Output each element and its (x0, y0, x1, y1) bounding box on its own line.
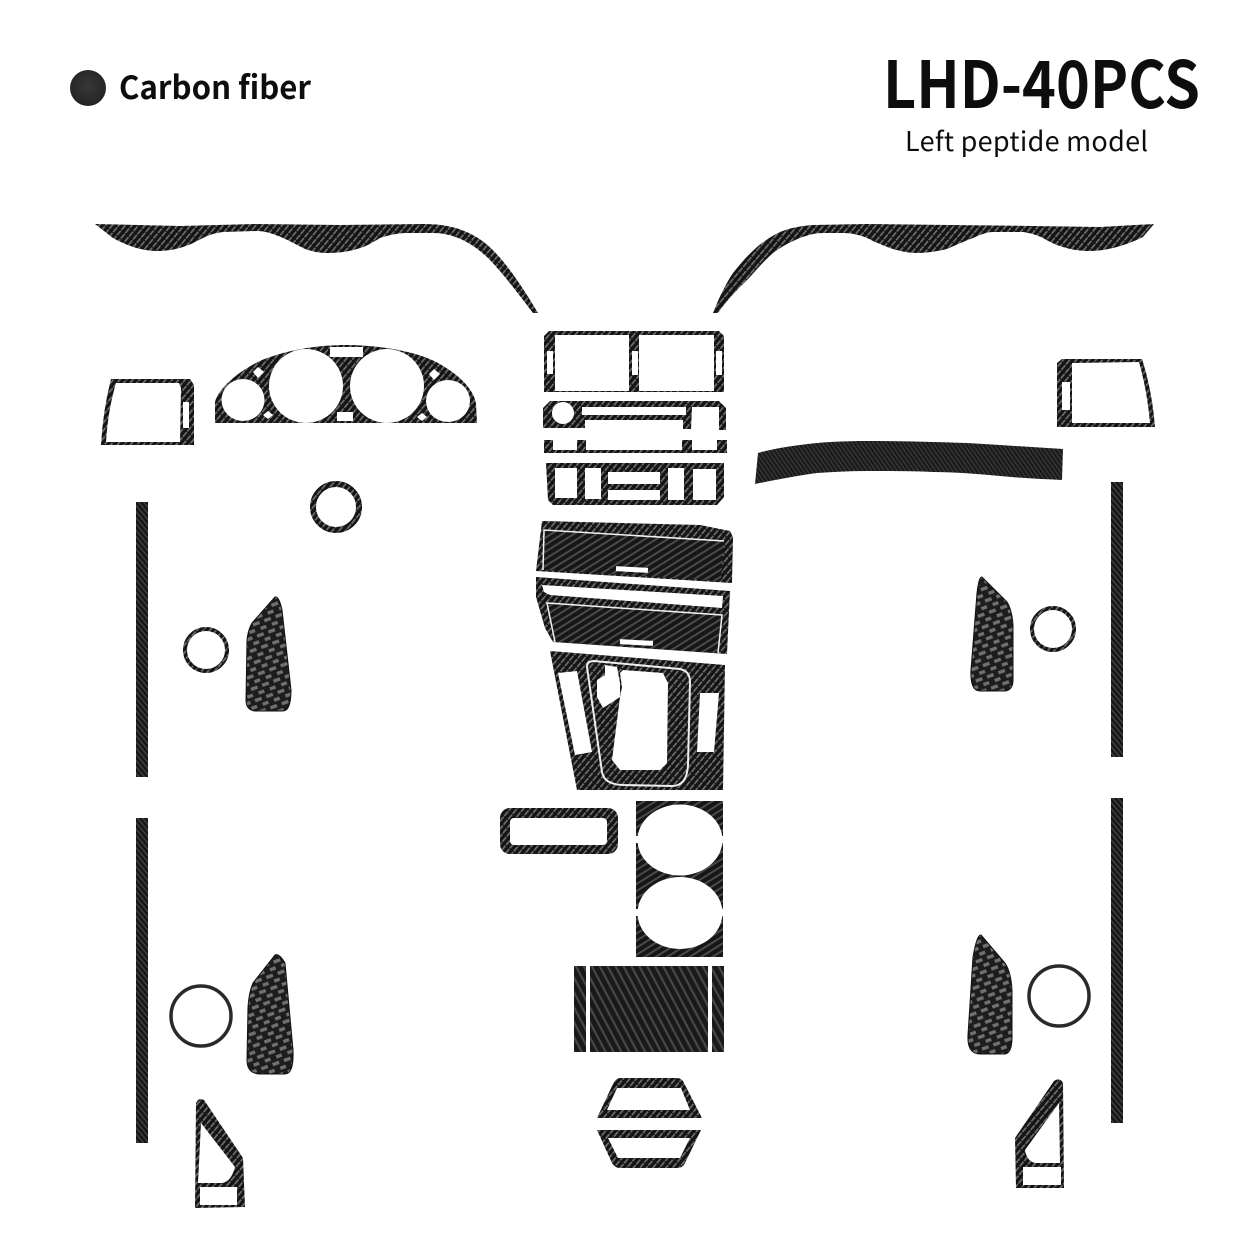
part: center console lid right strip (712, 966, 724, 1052)
part: left upper door ring (185, 629, 227, 671)
part: left lower door sill bar (136, 818, 148, 1143)
part: right lower window switch panel (968, 935, 1012, 1054)
part: long passenger trim strip (755, 441, 1063, 484)
part: right upper door sill bar (1111, 482, 1123, 757)
part: center air vent panel (544, 331, 724, 392)
part: instrument cluster surround (215, 345, 477, 423)
part: lower trapezoid frame (597, 1130, 701, 1168)
part: upper storage panel (536, 521, 733, 583)
part: lower storage panel (536, 577, 730, 654)
part: cup holder panel (636, 801, 723, 957)
part: radio surround upper (543, 401, 726, 430)
part: right upper door ring (1032, 608, 1074, 650)
part: left air vent frame (101, 379, 194, 445)
part: left upper door sill bar (136, 502, 148, 777)
title: LHD-40PCS: LHD-40PCS (883, 33, 1200, 127)
part: right lower door sill bar (1111, 798, 1123, 1123)
part: right dashboard strip (713, 224, 1154, 313)
part: left dashboard strip (95, 224, 538, 313)
subtitle: Left peptide model: Left peptide model (905, 120, 1148, 159)
part: small rounded rectangle frame (500, 808, 618, 854)
part: center console lid main (590, 966, 708, 1052)
icon: carbon fiber swatch (70, 70, 106, 106)
part: left door triangle trim (195, 1099, 245, 1208)
part: right air vent frame (1057, 359, 1155, 427)
legend label: Carbon fiber: Carbon fiber (119, 63, 311, 109)
part: right upper window switch panel (971, 577, 1013, 691)
part: steering column ring (313, 484, 359, 530)
part: gear shift surround (550, 651, 725, 790)
part: radio surround lower (544, 440, 727, 453)
part: right door triangle trim (1015, 1079, 1064, 1188)
part: center console lid left strip (574, 966, 586, 1052)
part: left lower window switch panel (247, 955, 293, 1074)
part: left lower door ring (171, 986, 231, 1046)
part: right lower door ring (1029, 966, 1089, 1026)
part: climate control panel (546, 463, 724, 505)
part: left upper window switch panel (246, 597, 291, 711)
part: upper trapezoid frame (597, 1078, 702, 1118)
